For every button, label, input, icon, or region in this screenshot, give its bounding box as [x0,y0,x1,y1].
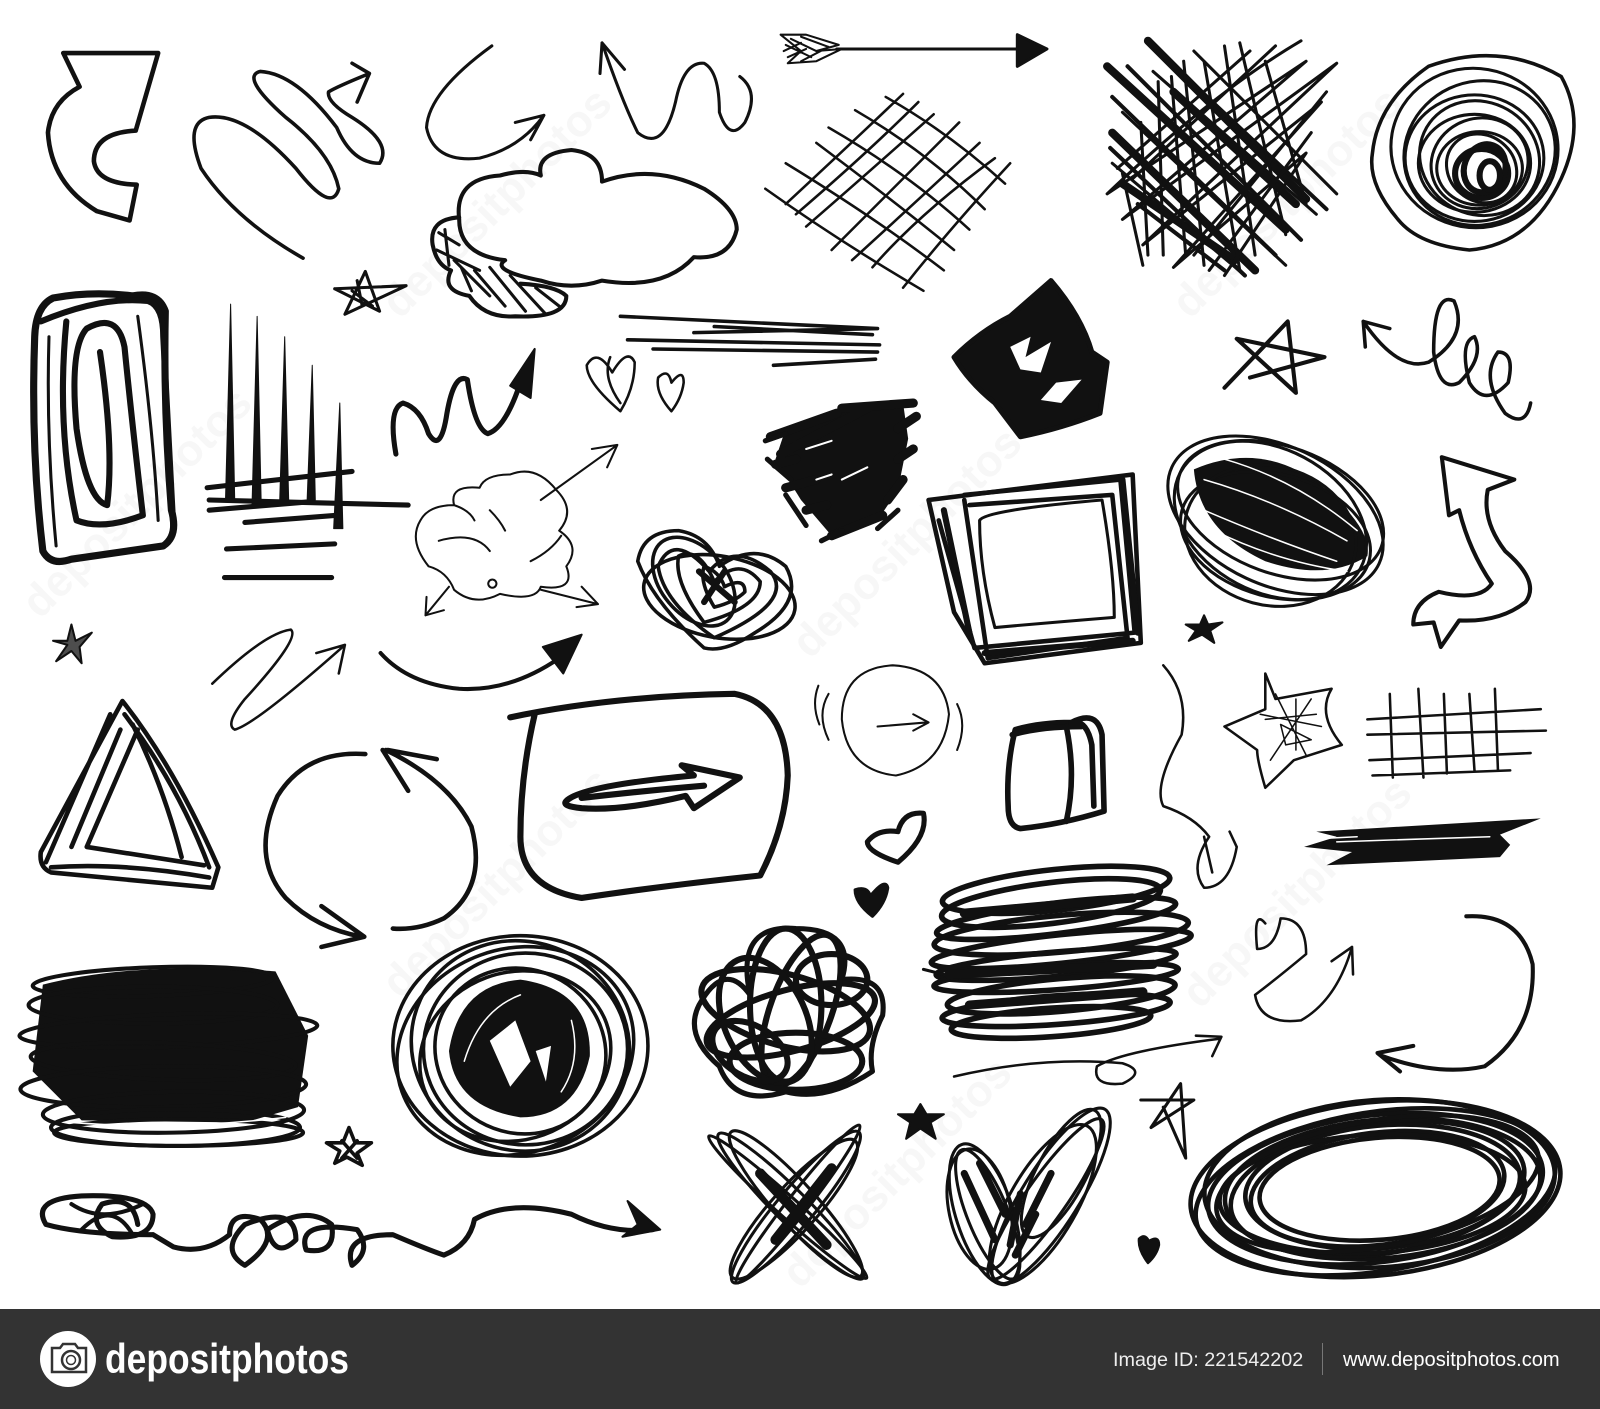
stacked scribble [923,858,1193,1044]
watermark text: depositphotos [372,758,621,1007]
circle scribble [367,905,664,1188]
black scribble blob [765,403,916,541]
tall rectangle scribble [34,294,174,561]
scribbled heart [935,1094,1129,1299]
small square scribble [1008,718,1104,829]
ring scribble [1182,1083,1569,1299]
cloud with hatching [432,150,737,316]
scribbled heart [636,522,802,650]
watermark text: depositphotos [1172,768,1421,1017]
star [1186,615,1222,643]
watermark text: depositphotos [782,418,1031,667]
website: www.depositphotos.com [1342,1349,1560,1371]
spring arrow [1363,300,1531,419]
star [898,1104,944,1139]
logo wordmark: depositphotos [105,1335,349,1382]
hatched grid [765,94,1010,291]
image id: Image ID: 221542202 [1113,1349,1303,1371]
speed lines [620,316,880,365]
loop line arrow [954,1036,1221,1084]
star [1224,321,1324,393]
looped arrow [1255,918,1353,1021]
small heart [1139,1236,1159,1263]
watermark text: depositphotos [772,1048,1021,1297]
arc arrow [381,635,582,689]
curved arrow [1378,916,1533,1071]
circle with arrow [815,665,962,776]
watermark text: depositphotos [372,78,621,327]
circular arrows [266,750,476,947]
watermark text [12,78,1421,1297]
star outline [1224,673,1342,788]
cross-hatched scribble [1107,41,1337,276]
hearts [855,813,924,916]
star [335,271,406,314]
brush bars [1304,818,1541,865]
rounded box with arrow [510,694,788,898]
curved arrow [427,46,544,159]
star [53,624,92,663]
hearts pair [587,357,684,411]
squiggle [1161,665,1237,888]
wavy arrow [600,43,751,138]
scribbled X [702,1118,876,1294]
watermark text: depositphotos [1162,78,1411,327]
oval scribble [1143,404,1408,631]
watermark text: depositphotos [12,378,261,627]
triangle scribble [41,701,218,888]
looping arrow [194,63,383,258]
looped arrow [212,630,345,730]
black wide scribble [19,963,318,1146]
tangled knot [693,925,883,1098]
feathered arrow [781,35,1047,66]
logo icon [40,1331,96,1387]
fancy curled arrow [1413,457,1530,647]
spiked bars [207,304,408,578]
footer bar [0,1309,1600,1409]
black square blob [954,281,1107,437]
zigzag arrow [393,349,535,454]
sketched grid [1367,689,1546,778]
spiral scribble [1372,55,1579,250]
cloud with three arrows [416,445,617,615]
star [327,1128,371,1165]
square scribble [929,474,1141,663]
block arrow top left [48,53,158,220]
long squiggle arrow [42,1196,660,1265]
star [1141,1084,1194,1158]
divider [1322,1343,1323,1375]
